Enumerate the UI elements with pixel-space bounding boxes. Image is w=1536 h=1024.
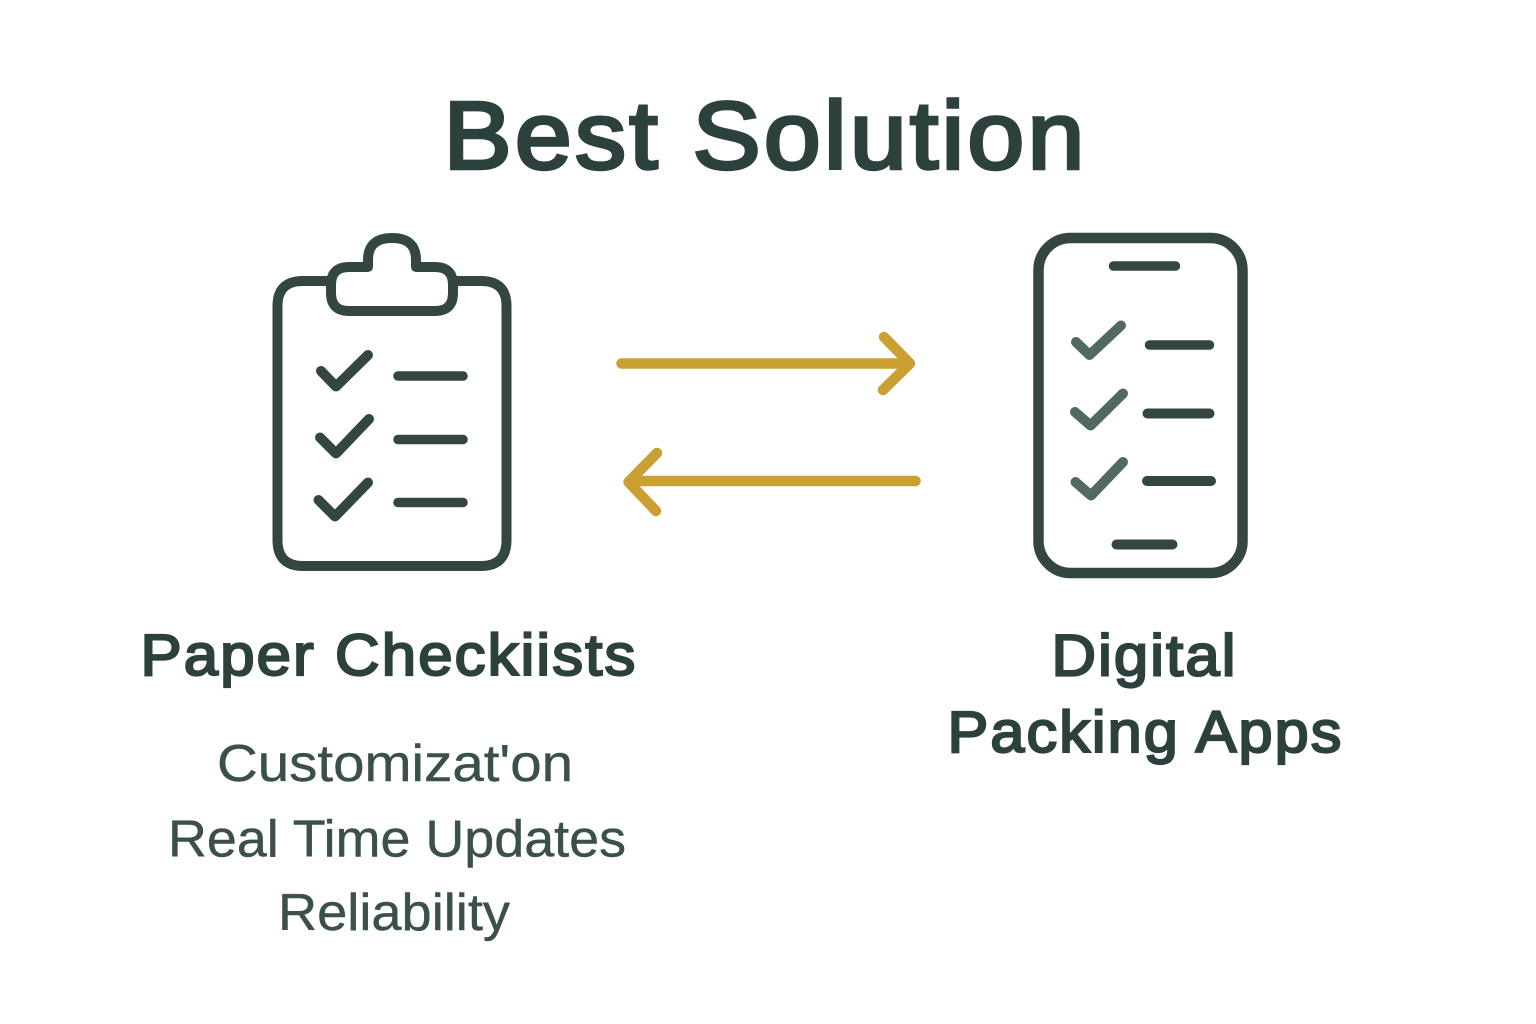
- heading: paper checklists: Paper Checkiists: [140, 623, 638, 688]
- arrow: left: [628, 453, 916, 511]
- heading: digital packing apps: [948, 624, 1344, 765]
- text block: paper checklist features: Customizat'on: [217, 735, 573, 793]
- arrow: right: [622, 337, 910, 390]
- icon: paper clipboard checklist: [278, 238, 506, 566]
- heading: digital packing apps: Packing Apps: [948, 700, 1344, 765]
- heading: digital packing apps: Digital: [1052, 624, 1238, 688]
- text block: paper checklist features: [168, 735, 626, 942]
- text block: paper checklist features: Real Time Updates: [168, 810, 626, 868]
- icon: phone checklist: [1038, 238, 1242, 573]
- title: Best Solution: [444, 82, 1088, 190]
- text block: paper checklist features: Reliability: [278, 884, 510, 942]
